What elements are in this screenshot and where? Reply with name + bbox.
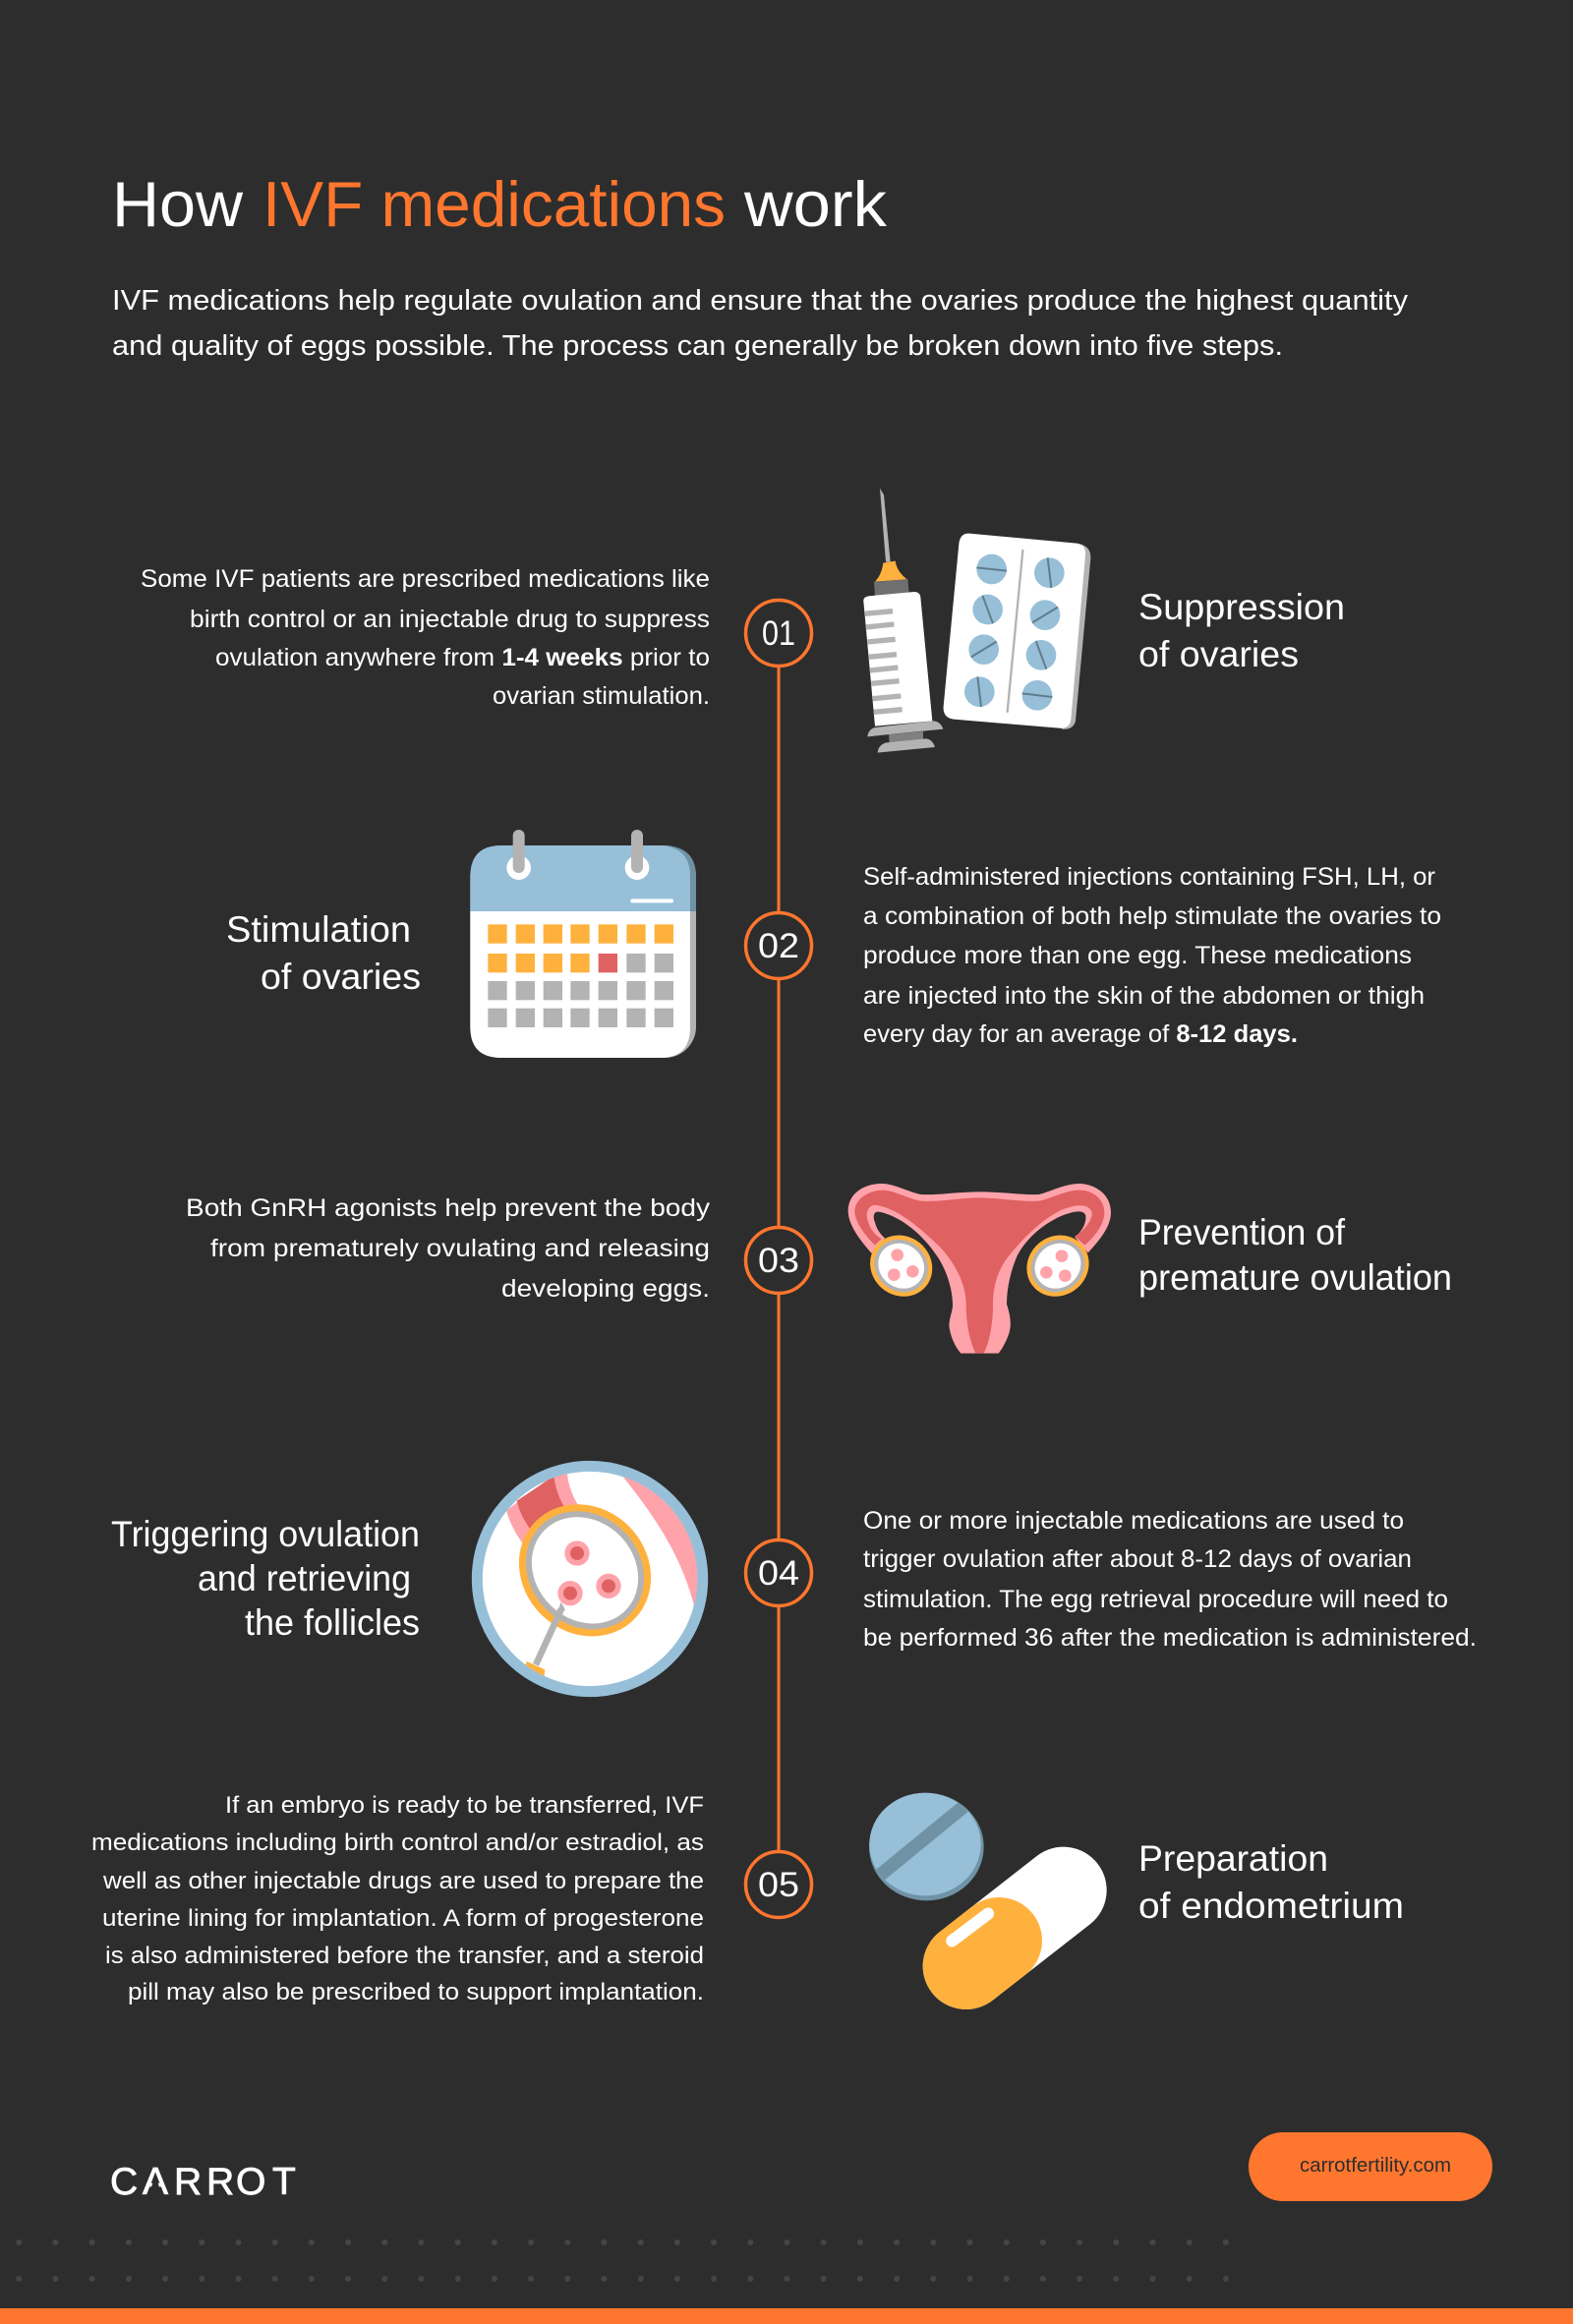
step number 04: 04 [758,1554,799,1593]
step 4 description: One or more injectable medications are used to [863,1507,1404,1535]
panel: step 5 preparation of endometrium [91,1792,1404,2005]
step 2 description: every day for an average of 8-12 days. [863,1020,1298,1048]
step number 01: 01 [762,614,795,653]
step 2 description: produce more than one egg. These medications [863,942,1412,969]
panel: step 3 prevention of premature ovulation [186,1184,1452,1354]
step 5 description: pill may also be prescribed to support implantation. [128,1979,704,2005]
step number 02: 02 [758,927,799,965]
step 1 description [141,565,710,710]
intro paragraph [112,285,1409,362]
step 4 heading: and retrieving [198,1558,411,1598]
step 5 heading [1138,1838,1404,1926]
step number 04 [745,1540,812,1606]
panel: step 4 triggering ovulation [111,1466,1477,1692]
step 4 heading [111,1514,420,1643]
step 1 description: Some IVF patients are prescribed medications like [141,565,710,593]
intro paragraph: and quality of eggs possible. The process can generally be broken down into five steps. [112,330,1283,362]
step 1 description: ovulation anywhere from 1-4 weeks prior to [215,644,710,671]
step 1 heading: Suppression [1138,587,1345,627]
step 1 heading: of ovaries [1138,634,1299,674]
step 5 description [91,1792,704,2005]
step 2 heading: Stimulation [226,909,411,950]
step 1 description: birth control or an injectable drug to suppress [190,606,710,633]
step number 05: 05 [758,1866,799,1904]
step 2 description: Self-administered injections containing FSH, LH, or [863,863,1435,891]
title: How [112,168,244,240]
icon: tablet and capsule [869,1793,1064,1966]
title [112,168,888,240]
step 5 heading: Preparation [1138,1838,1328,1879]
title: IVF medications [262,168,726,240]
step number 02 [745,912,812,979]
step 4 heading: the follicles [245,1602,420,1643]
icon: uterus and ovaries [848,1184,1111,1354]
timeline [745,600,812,1917]
website button: carrotfertility.com [1300,2155,1451,2177]
step 4 description [863,1507,1477,1652]
step 4 heading: Triggering ovulation [111,1514,420,1554]
step 3 heading: premature ovulation [1138,1257,1452,1298]
step 3 description: Both GnRH agonists help prevent the body [186,1194,711,1222]
step 5 description: medications including birth control and/or estradiol, as [91,1830,704,1856]
step 3 description [186,1194,711,1303]
step 4 description: be performed 36 after the medication is administered. [863,1624,1477,1652]
icon: follicle retrieval lens [477,1466,708,1692]
step 3 heading: Prevention of [1138,1212,1346,1252]
step 5 description: uterine lining for implantation. A form of progesterone [102,1905,704,1932]
step number 03: 03 [758,1242,799,1280]
step number 01 [745,600,812,667]
icon: calendar [470,830,696,1058]
step 4 description: trigger ovulation after about 8-12 days of ovarian [863,1545,1412,1573]
step 5 heading: of endometrium [1138,1886,1404,1926]
title: work [743,168,888,240]
step 3 heading [1138,1212,1452,1298]
step 2 description [863,863,1441,1048]
step 5 description: If an embryo is ready to be transferred, IVF [225,1792,704,1819]
step 1 heading [1138,587,1345,674]
step 2 description: are injected into the skin of the abdomen or thigh [863,982,1425,1010]
step 1 description: ovarian stimulation. [493,682,710,710]
step 2 description: a combination of both help stimulate the ovaries to [863,902,1441,930]
step 3 description: from prematurely ovulating and releasing [210,1235,710,1262]
step 2 heading [226,909,421,997]
panel: step 1 suppression of ovaries [141,489,1345,753]
intro paragraph: IVF medications help regulate ovulation and ensure that the ovaries produce the highest quantity [112,285,1409,317]
panel: step 2 stimulation of ovaries [226,830,1441,1058]
step 5 description: well as other injectable drugs are used to prepare the [102,1868,704,1894]
step number 05 [745,1852,812,1917]
icon: syringe and blister pack [863,489,1090,753]
step 2 heading: of ovaries [261,957,421,997]
logo: Carrot: CARROT [110,2161,296,2203]
step 4 description: stimulation. The egg retrieval procedure will need to [863,1586,1448,1613]
website button [1249,2132,1492,2201]
step 3 description: developing eggs. [501,1275,710,1303]
step 5 description: is also administered before the transfer, and a steroid [105,1943,704,1969]
step number 03 [745,1227,812,1294]
